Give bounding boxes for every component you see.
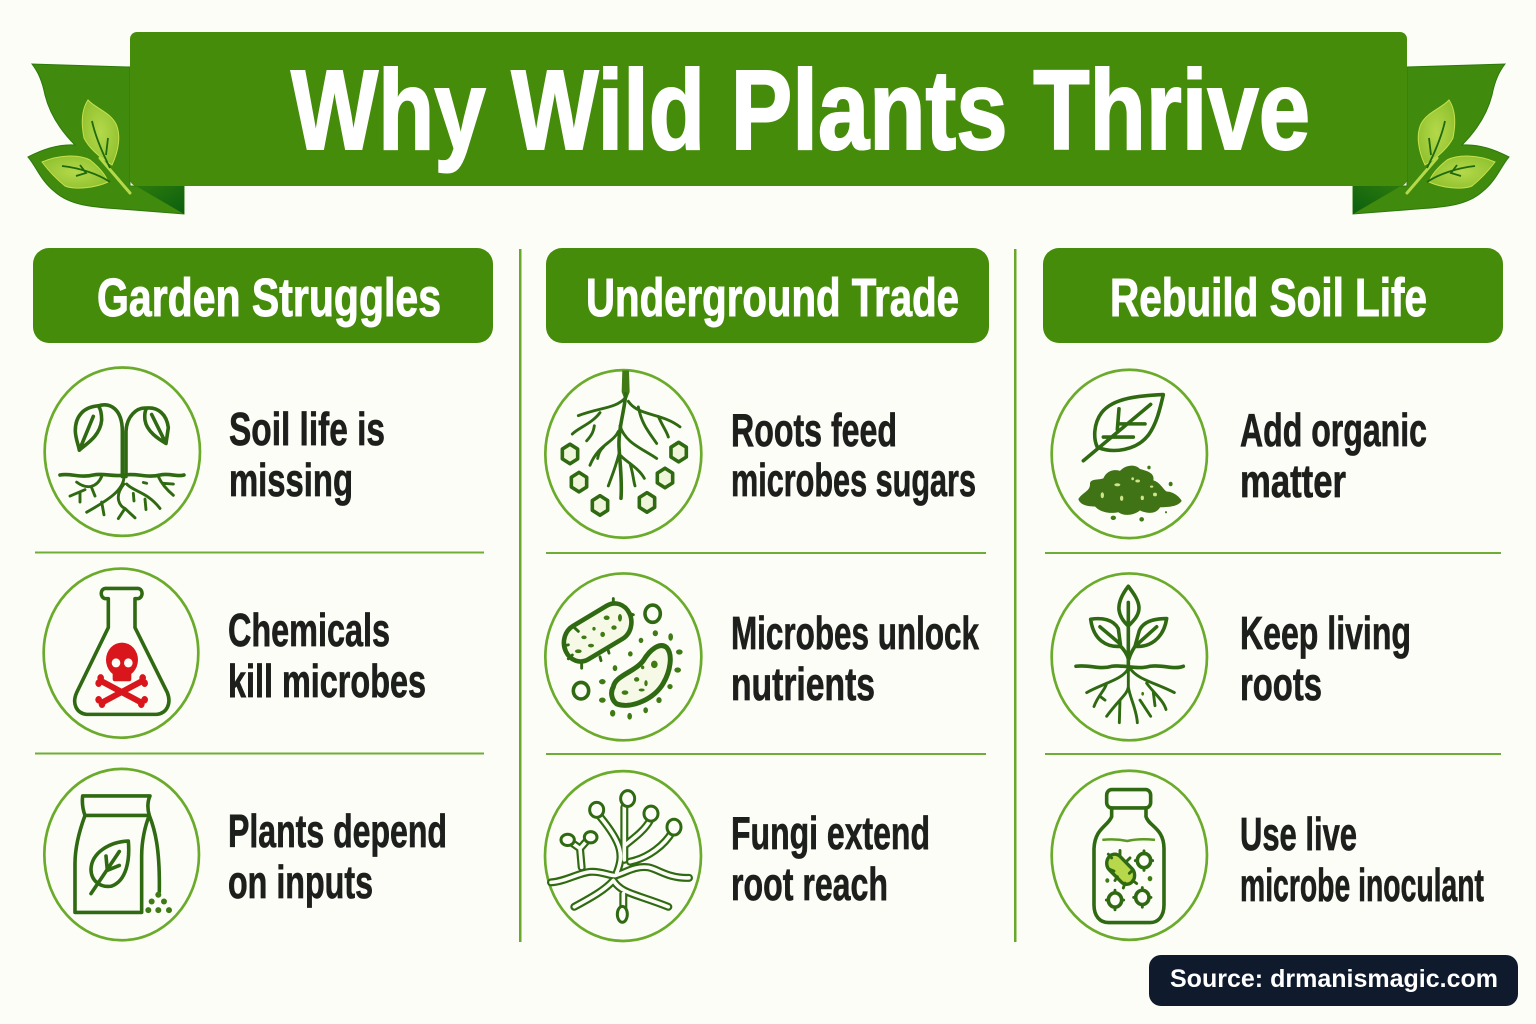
panel: Garden Struggles <box>33 248 493 940</box>
item: Add organic matter <box>1052 370 1427 538</box>
text: matter <box>1240 455 1346 507</box>
heading: Rebuild Soil Life: Rebuild Soil Life <box>1110 268 1427 328</box>
text: roots <box>1240 658 1322 710</box>
panel: Rebuild Soil Life <box>1043 248 1503 940</box>
text: Microbes unlock <box>731 607 979 659</box>
text: missing <box>229 454 353 506</box>
text: root reach <box>731 858 888 910</box>
heading: Garden Struggles <box>33 248 493 343</box>
text <box>1240 404 1427 507</box>
text: Roots feed <box>731 404 897 456</box>
text <box>731 404 976 506</box>
icon: flask with skull <box>44 569 198 738</box>
heading: Underground Trade <box>546 248 989 343</box>
text <box>731 807 930 910</box>
text: Keep living <box>1240 607 1411 659</box>
item: Plants depend on inputs <box>44 769 447 940</box>
item: Roots feed microbes sugars <box>545 370 976 538</box>
item: Soil life is missing <box>45 368 385 536</box>
text: Use live <box>1240 808 1357 860</box>
item: Use live microbe inoculant <box>1052 771 1484 940</box>
icon: leaf and compost <box>1052 370 1207 538</box>
item: Fungi extend root reach <box>545 771 930 941</box>
item: Microbes unlock nutrients <box>545 573 979 740</box>
icon: bacteria <box>545 573 701 740</box>
ribbon tail with leaves: right <box>1353 64 1509 214</box>
icon: fertilizer bag <box>44 769 199 940</box>
panel: Underground Trade <box>545 248 989 941</box>
text: Add organic <box>1240 404 1427 456</box>
title text: Why Wild Plants Thrive <box>291 47 1310 173</box>
text <box>228 604 426 707</box>
source badge <box>1149 955 1518 1006</box>
text: microbes sugars <box>731 454 976 506</box>
item: Keep living roots <box>1052 573 1411 740</box>
text: Soil life is <box>229 403 385 455</box>
item: Chemicals kill microbes <box>44 569 426 738</box>
text <box>1240 808 1484 911</box>
heading: Garden Struggles: Garden Struggles <box>97 268 441 328</box>
icon: plant with living roots <box>1052 573 1207 740</box>
text <box>228 805 447 908</box>
text <box>1240 607 1411 710</box>
text: kill microbes <box>228 655 426 707</box>
text <box>731 607 979 710</box>
icon: seedling with roots <box>45 368 200 536</box>
icon: inoculant jar <box>1052 771 1207 940</box>
text <box>229 403 385 506</box>
ribbon tail with leaves: left <box>28 64 184 214</box>
heading: Rebuild Soil Life <box>1043 248 1503 343</box>
text: on inputs <box>228 856 373 908</box>
banner bar <box>130 32 1407 186</box>
title banner <box>28 32 1509 214</box>
source badge: Source: drmanismagic.com <box>1170 965 1498 993</box>
text: Plants depend <box>228 805 447 857</box>
column dividers <box>519 249 1016 942</box>
text: nutrients <box>731 658 875 710</box>
text: Fungi extend <box>731 807 930 859</box>
text: Chemicals <box>228 604 390 656</box>
icon: fungal hyphae <box>545 771 701 941</box>
icon: roots with hexagon sugars <box>545 370 701 538</box>
heading: Underground Trade: Underground Trade <box>586 268 959 328</box>
